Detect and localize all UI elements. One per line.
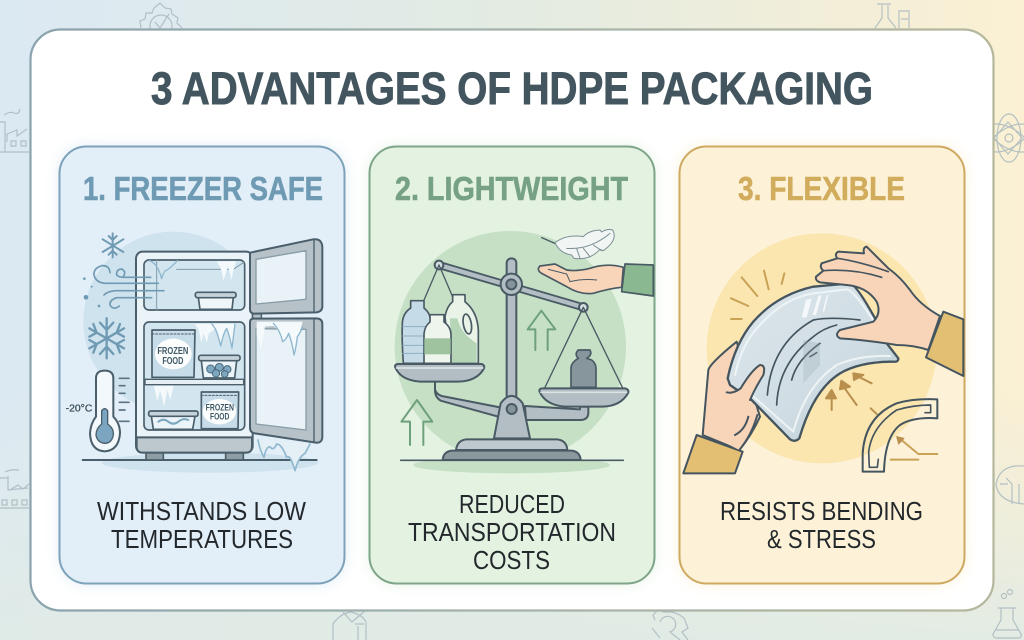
left thumb bbox=[713, 365, 764, 450]
upper door bbox=[250, 239, 322, 314]
shelf bbox=[145, 379, 244, 385]
wind lines bbox=[94, 266, 164, 308]
container top bbox=[198, 297, 233, 309]
caption: withstands low temperatures bbox=[97, 496, 306, 554]
container low bbox=[151, 416, 195, 429]
caption: resists bending and stress: & STRESS bbox=[767, 524, 876, 554]
icicles bbox=[149, 261, 310, 471]
caption: reduced transportation costs: COSTS bbox=[473, 545, 550, 575]
top compartment bbox=[144, 260, 245, 310]
jug bbox=[445, 295, 478, 363]
ground line bbox=[83, 457, 317, 463]
icon backdrop circle bbox=[83, 232, 263, 412]
illustration: hands bending sheet bbox=[683, 233, 963, 473]
water bottle bbox=[402, 301, 431, 363]
title: 3 ADVANTAGES OF HDPE PACKAGING bbox=[151, 63, 873, 114]
caption: reduced transportation costs: TRANSPORTATION bbox=[408, 517, 616, 547]
heading: flexible: 3. FLEXIBLE bbox=[738, 170, 905, 207]
left pan bbox=[395, 364, 484, 382]
left cuff bbox=[683, 435, 743, 473]
right hand bbox=[816, 247, 940, 350]
ground line bbox=[401, 458, 623, 463]
container with berries bbox=[201, 361, 237, 378]
pivot bbox=[501, 274, 522, 295]
icon backdrop circle bbox=[395, 231, 626, 462]
caption: reduced transportation costs bbox=[408, 489, 616, 575]
panel: flexible bbox=[679, 146, 965, 584]
caption: reduced transportation costs: REDUCED bbox=[459, 489, 565, 519]
bending sheet bbox=[728, 283, 898, 441]
caption: resists bending and stress bbox=[720, 496, 923, 554]
frozen food labels: FOOD bbox=[210, 411, 230, 421]
fridge body bbox=[136, 239, 322, 453]
frozen vegetables bbox=[158, 419, 188, 424]
illustration: open freezer bbox=[66, 232, 322, 473]
right pan bbox=[539, 388, 628, 407]
snowflakes bbox=[89, 233, 124, 358]
balance beam bbox=[439, 265, 583, 307]
left hand bbox=[703, 342, 760, 450]
frost patches bbox=[155, 339, 236, 424]
right cuff bbox=[926, 312, 963, 376]
medium bottle bbox=[424, 315, 451, 363]
door hinge bbox=[253, 314, 261, 318]
strings bbox=[423, 265, 622, 387]
tension marks bbox=[731, 271, 784, 319]
lower door bbox=[250, 318, 322, 443]
heading: lightweight: 2. LIGHTWEIGHT bbox=[395, 170, 628, 207]
fridge feet bbox=[146, 452, 243, 460]
open hand bbox=[538, 264, 653, 296]
frozen food labels: FOOD bbox=[162, 356, 183, 367]
scale stand bbox=[423, 258, 622, 460]
frozen food labels: FROZEN bbox=[157, 346, 188, 357]
bent profile diagram bbox=[863, 399, 937, 472]
thermometer bbox=[66, 371, 129, 451]
feather bbox=[542, 229, 614, 259]
temperature label: -20°C bbox=[66, 403, 92, 414]
panel: freezer safe bbox=[59, 146, 345, 584]
frozen food bag 2 bbox=[201, 392, 239, 429]
up arrows bbox=[401, 311, 555, 445]
weight bbox=[571, 350, 596, 387]
frozen food labels: FROZEN bbox=[206, 403, 234, 413]
ice specks bbox=[83, 277, 100, 307]
lower compartment bbox=[144, 322, 245, 430]
base bbox=[494, 396, 530, 438]
heading: freezer safe: 1. FREEZER SAFE bbox=[83, 170, 323, 207]
lower arms bbox=[435, 383, 500, 417]
illustration: balance scale bbox=[395, 229, 653, 473]
caption: withstands low temperatures: WITHSTANDS LOW bbox=[97, 496, 306, 526]
panel: lightweight bbox=[369, 146, 655, 584]
pressure arrows bbox=[826, 373, 877, 414]
frozen food labels bbox=[157, 346, 234, 421]
caption: withstands low temperatures: TEMPERATURES bbox=[111, 524, 293, 554]
frozen food bag 1 bbox=[152, 330, 195, 377]
icon backdrop circle bbox=[707, 233, 937, 463]
caption: resists bending and stress: RESISTS BENDING bbox=[720, 496, 923, 526]
frozen berries bbox=[207, 363, 231, 377]
